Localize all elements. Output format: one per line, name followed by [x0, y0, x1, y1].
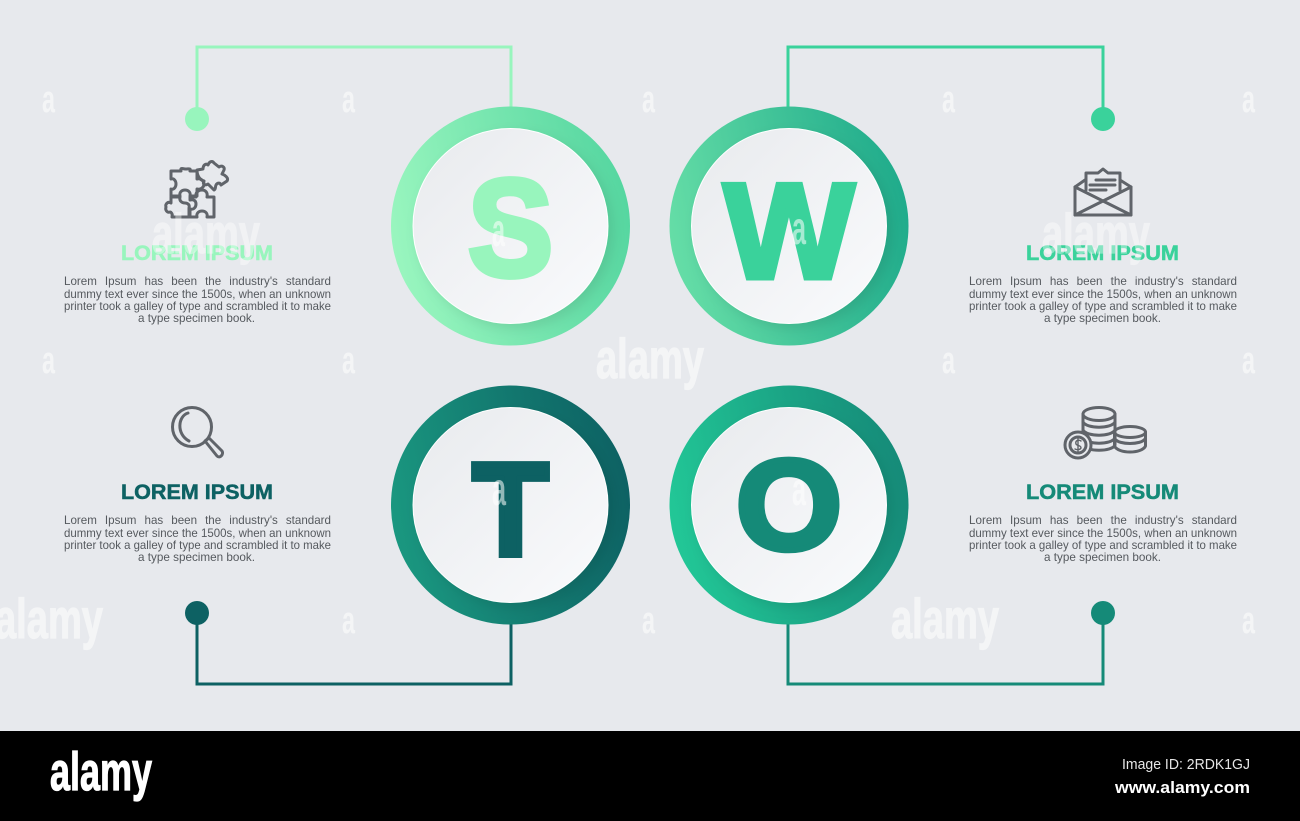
circle: W	[670, 106, 908, 346]
watermarks: a	[942, 340, 956, 382]
text block: top right: printer took a galley of type and scrambled it to make	[969, 299, 1237, 313]
watermarks: a	[792, 463, 806, 515]
text block: top left: LOREM IPSUM	[121, 242, 273, 265]
text block: top left: a type specimen book.	[138, 311, 255, 325]
text block: top left	[64, 242, 331, 325]
watermarks: alamy	[1042, 202, 1150, 265]
icon: magnifier	[172, 408, 223, 457]
watermarks: a	[642, 79, 656, 121]
text block: top left: Lorem Ipsum has been the industry's standard	[64, 274, 331, 288]
circle: S	[391, 106, 630, 346]
watermarks: alamy	[891, 587, 999, 650]
text block: bottom right: Lorem Ipsum has been the industry's standard	[969, 513, 1237, 527]
text block: bottom left	[64, 481, 331, 564]
icon: puzzle	[166, 162, 228, 217]
circle: S: S	[468, 152, 553, 306]
text block: bottom right: printer took a galley of type and scrambled it to make	[969, 538, 1237, 552]
connector: strengths	[185, 47, 511, 131]
footer bar: Image ID: 2RDK1GJ	[1122, 756, 1250, 773]
watermarks: alamy	[152, 202, 260, 265]
text block: bottom left: printer took a galley of type and scrambled it to make	[64, 538, 331, 552]
circle: O: O	[736, 434, 842, 577]
text block: bottom right	[969, 481, 1237, 564]
connector: threats	[185, 601, 511, 684]
watermarks: a	[42, 340, 56, 382]
text block: bottom right: LOREM IPSUM	[1026, 481, 1179, 504]
watermarks: a	[342, 79, 356, 121]
watermarks: a	[1242, 340, 1256, 382]
connector: weaknesses	[788, 47, 1115, 131]
watermarks: a	[942, 79, 956, 121]
text block: top right: LOREM IPSUM	[1026, 242, 1179, 265]
text block: bottom right: a type specimen book.	[1044, 550, 1161, 564]
watermarks: a	[642, 600, 656, 642]
watermarks: a	[792, 202, 806, 254]
connector: opportunities	[788, 601, 1115, 684]
circle: T	[391, 386, 630, 624]
circle: O	[670, 386, 908, 624]
text block: top right: Lorem Ipsum has been the industry's standard	[969, 274, 1237, 288]
watermarks: a	[42, 79, 56, 121]
text block: bottom right: dummy text ever since the 1500s, when an unknown	[969, 526, 1237, 540]
watermarks: a	[342, 600, 356, 642]
circle: W: W	[724, 155, 855, 307]
text block: bottom left: a type specimen book.	[138, 550, 255, 564]
watermarks: a	[342, 340, 356, 382]
text block: top left: dummy text ever since the 1500s, when an unknown	[64, 287, 331, 301]
footer bar: alamy	[50, 742, 152, 802]
text block: top right: a type specimen book.	[1044, 311, 1161, 325]
watermarks: a	[1242, 600, 1256, 642]
icon: envelope	[1075, 169, 1131, 215]
watermarks	[0, 79, 1256, 650]
watermarks: a	[1242, 79, 1256, 121]
text block: bottom left: Lorem Ipsum has been the industry's standard	[64, 513, 331, 527]
footer bar	[0, 731, 1300, 821]
icon: coins	[1065, 408, 1146, 458]
watermarks: a	[492, 463, 506, 515]
footer bar: www.alamy.com	[1114, 778, 1250, 797]
text block: top right	[969, 242, 1237, 325]
text block: top right: dummy text ever since the 1500s, when an unknown	[969, 287, 1237, 301]
watermarks: alamy	[596, 327, 704, 390]
watermarks: a	[492, 204, 505, 256]
text block: top left: printer took a galley of type and scrambled it to make	[64, 299, 331, 313]
text block: bottom left: dummy text ever since the 1500s, when an unknown	[64, 526, 331, 540]
circle: T: T	[472, 436, 548, 583]
text block: bottom left: LOREM IPSUM	[121, 481, 273, 504]
